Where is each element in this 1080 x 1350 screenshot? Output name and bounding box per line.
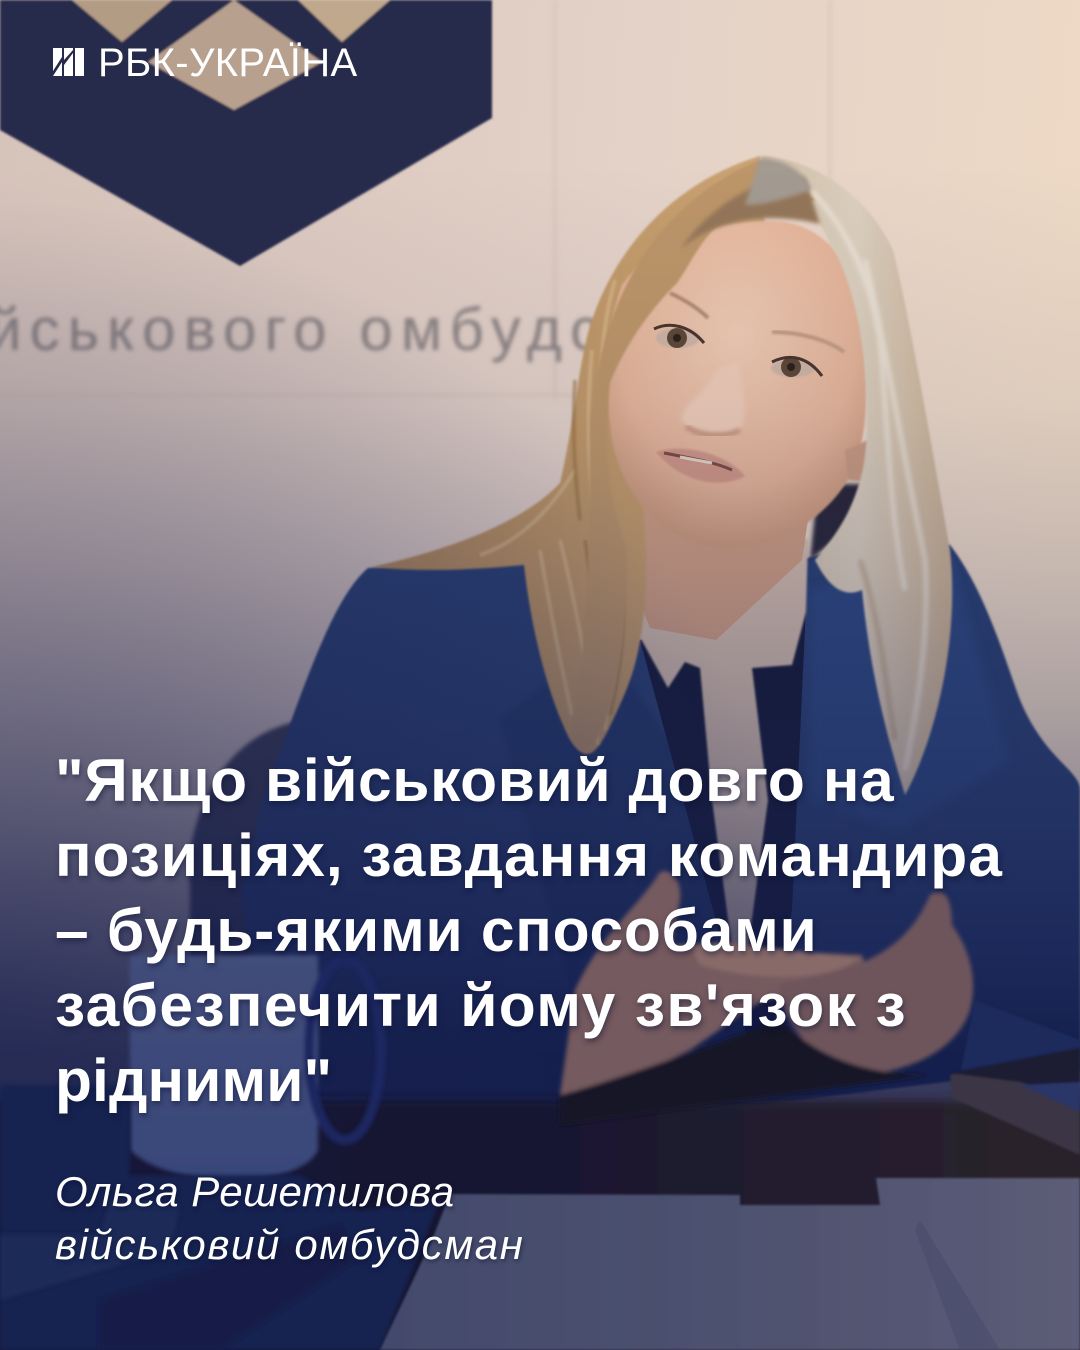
quote <box>55 746 1003 1118</box>
ear <box>845 440 868 482</box>
coffee mug <box>130 955 381 1180</box>
left hair strands <box>480 280 615 745</box>
author <box>55 1168 525 1268</box>
sleeve over the desk edge <box>960 1000 1080 1075</box>
quote: "Якщо військовий довго на <box>55 746 894 814</box>
author name: Ольга Решетилова <box>55 1168 455 1215</box>
neck <box>622 490 808 640</box>
quote: забезпечити йому зв'язок з <box>55 971 907 1039</box>
shadow between neck and hair <box>810 484 862 560</box>
chair <box>190 720 310 1000</box>
hands <box>560 871 973 1125</box>
notebook <box>950 1048 1080 1155</box>
quote: позиціях, завдання командира <box>55 821 1003 889</box>
right platinum hair <box>760 156 952 795</box>
dark top under blouse <box>640 606 806 1090</box>
wall emblem <box>0 0 492 266</box>
quote: рідними" <box>55 1046 332 1114</box>
jacket <box>240 540 1080 1130</box>
logo mark <box>53 48 84 76</box>
front left hair sweep <box>570 160 815 750</box>
facial features <box>654 293 844 483</box>
face <box>607 221 866 548</box>
brand name: РБК-УКРАЇНА <box>98 41 357 85</box>
quote: – будь-якими способами <box>55 896 817 964</box>
author role: військовий омбудсман <box>55 1221 525 1268</box>
left foreground <box>0 1085 440 1350</box>
desk <box>0 1100 1080 1350</box>
blouse, collar and tie <box>608 538 808 1008</box>
logo <box>53 41 358 85</box>
papers on desk <box>0 1178 1080 1350</box>
wall lettering: йськового омбудс <box>0 296 600 363</box>
wall panel seams <box>0 0 830 400</box>
back left hair <box>372 156 770 754</box>
